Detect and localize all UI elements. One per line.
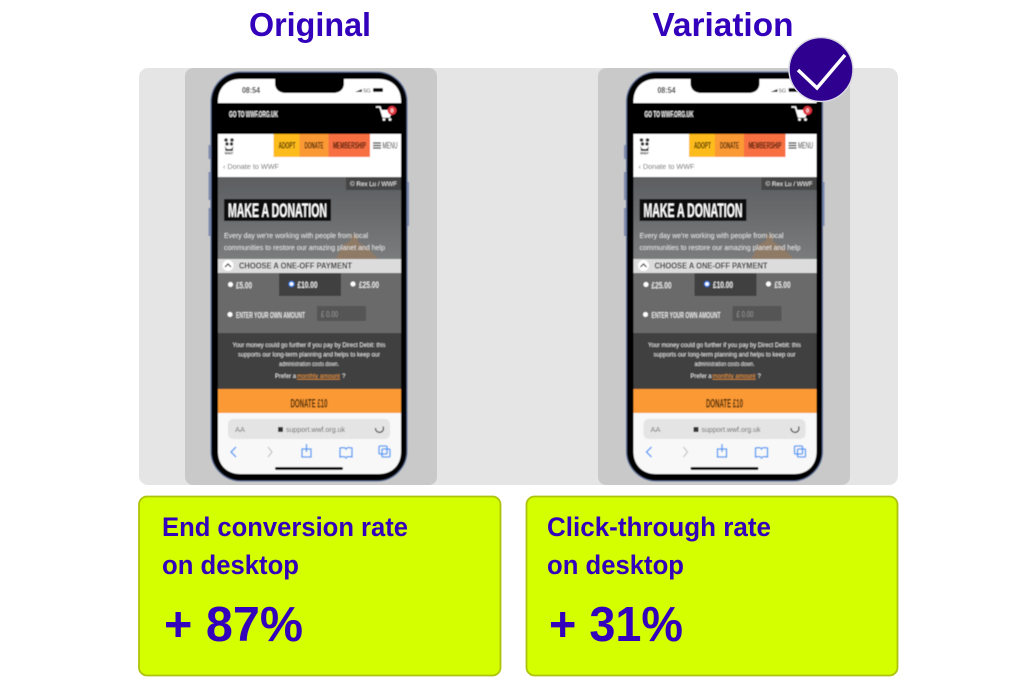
direct debit text: Your money could go further if you pay by Direct Debit: this [648,342,801,349]
credit: © Rex Lu / WWF [766,180,813,188]
donate button [218,389,401,413]
icon: cart: 0 [806,108,809,114]
browser icons [646,444,806,458]
direct debit text: administration costs down. [694,361,755,368]
credit: © Rex Lu / WWF [350,180,397,188]
icon: cart [792,106,812,121]
panel: original phone backdrop [185,68,437,485]
notch [690,78,760,93]
logo: panda: WWF [225,152,234,156]
direct debit panel [218,333,401,389]
status icons: 5G [779,88,786,94]
option £25: £25.00 [359,280,379,290]
url field [228,419,390,439]
phone body [211,72,407,481]
payment band [634,259,816,273]
options area [218,273,401,333]
panel: light grey backdrop [139,68,898,485]
hero title [640,199,746,222]
icon: winner check badge [789,38,853,102]
own amount: ENTER YOUR OWN AMOUNT [652,310,721,320]
direct debit text [648,342,801,380]
nav: donate [715,134,744,157]
logo: panda: WWF [640,152,650,156]
link: go to wwf: GO TO WWF.ORG.UK [229,109,278,119]
own amount: ENTER YOUR OWN AMOUNT [236,310,305,320]
phone body [626,72,822,481]
band chevron [638,260,649,271]
own amount [228,306,366,321]
status time: 08:54 [658,86,676,95]
direct debit panel [634,333,816,389]
browser bar [634,413,816,474]
hero [218,177,401,260]
direct debit text: supports our long-term planning and helps to keep our [654,352,796,358]
selected option [694,273,756,296]
hero title: MAKE A DONATION [228,200,327,222]
status icons: 5G [363,88,371,94]
option £5: £5.00 [236,280,252,290]
donate button: DONATE £10 [706,398,743,410]
donate button [634,389,816,413]
hero text: Every day we're working with people from local [224,231,368,240]
option £5 [228,280,252,290]
panel: end conversion rate [139,496,500,676]
nav: donate [300,134,328,157]
option £5 [766,280,790,290]
option £10: £10.00 [713,280,733,290]
label: end conversion rate: on desktop [162,550,299,580]
stat: +87%: + 87% [164,598,303,652]
payment band [218,259,401,273]
url field [644,419,806,439]
black header [218,104,401,134]
options area [634,273,816,333]
phone side buttons [624,145,824,236]
own amount [643,306,782,321]
phone side buttons [208,145,409,236]
nav: menu [373,140,398,150]
phone screen status area [218,79,401,103]
hero text [224,231,385,252]
direct debit text: ? [342,373,346,380]
home indicator [690,467,758,470]
band title: CHOOSE A ONE-OFF PAYMENT [239,262,352,270]
hero text: communities to restore our amazing planet and help [224,243,385,252]
heading: Original: Original [249,6,371,43]
breadcrumb: ‹ Donate to WWF [223,162,279,171]
notch [275,78,344,93]
nav: adopt: ADOPT [694,140,711,150]
direct debit text: monthly amount [712,373,756,380]
selected option [279,273,341,296]
direct debit text: Prefer a [690,373,712,380]
nav: menu: MENU [798,140,813,150]
nav: adopt [689,134,715,157]
url field: AA [235,425,245,434]
white nav [218,134,401,177]
giraffe [336,233,378,259]
nav: menu: MENU [382,140,398,150]
browser icons [231,444,390,458]
hero text [640,231,800,252]
home indicator [275,467,343,470]
nav: donate: DONATE [304,140,324,150]
direct debit text: Your money could go further if you pay by Direct Debit: this [232,342,386,349]
credit [762,177,816,190]
phone: original [208,72,409,481]
url field: support.wwf.org.uk [702,425,761,434]
logo: panda [224,138,234,156]
option £25: £25.00 [652,280,672,290]
direct debit text: monthly amount [297,373,340,380]
giraffe [752,233,794,259]
option £10: £10.00 [298,280,318,290]
url field: support.wwf.org.uk [286,425,345,434]
status icons [355,88,383,94]
phone: variation [624,72,824,481]
nav: membership [328,134,370,157]
direct debit text [232,342,386,380]
label: end conversion rate: End conversion rate [162,512,408,542]
icon: cart [376,106,396,121]
option £5: £5.00 [774,280,790,290]
logo: panda [640,138,650,156]
heading: Variation: Variation [652,6,794,43]
phone screen status area [634,79,816,103]
nav: menu [788,140,813,150]
browser bar [218,413,401,474]
panel: variation phone backdrop [598,68,850,485]
direct debit text: ? [758,373,762,380]
status icons [770,88,798,94]
credit [346,177,401,190]
hero title: MAKE A DONATION [644,200,742,222]
option £10 [704,280,733,290]
hero [634,177,816,260]
panel: click-through rate [526,496,898,676]
option £25 [350,280,379,290]
nav: membership: MEMBERSHIP [748,140,782,150]
own amount: £ 0.00 [736,309,754,319]
status time: 08:54 [242,86,260,95]
black header [634,104,816,134]
stat: +31%: + 31% [549,598,683,652]
nav: membership: MEMBERSHIP [333,140,366,150]
white nav [634,134,816,177]
hero text: Every day we're working with people from local [640,231,784,240]
direct debit text: supports our long-term planning and helps to keep our [238,352,380,358]
direct debit text: Prefer a [275,373,296,380]
direct debit text: administration costs down. [279,361,339,368]
option £25 [644,280,672,290]
label: click-through rate: on desktop [547,550,684,580]
label: click-through rate: Click-through rate [547,512,771,542]
icon: cart: 0 [390,108,394,114]
hero text: communities to restore our amazing planet and help [640,243,800,252]
link: go to wwf: GO TO WWF.ORG.UK [644,109,694,119]
band chevron [222,260,234,271]
band title: CHOOSE A ONE-OFF PAYMENT [654,262,768,270]
nav: adopt: ADOPT [278,140,296,150]
hero title [224,199,331,222]
option £10 [289,280,318,290]
url field: AA [650,425,661,434]
nav: adopt [274,134,300,157]
donate button: DONATE £10 [290,398,328,410]
breadcrumb: ‹ Donate to WWF [638,162,695,171]
nav: membership [744,134,786,157]
nav: donate: DONATE [720,140,739,150]
own amount: £ 0.00 [321,309,338,319]
